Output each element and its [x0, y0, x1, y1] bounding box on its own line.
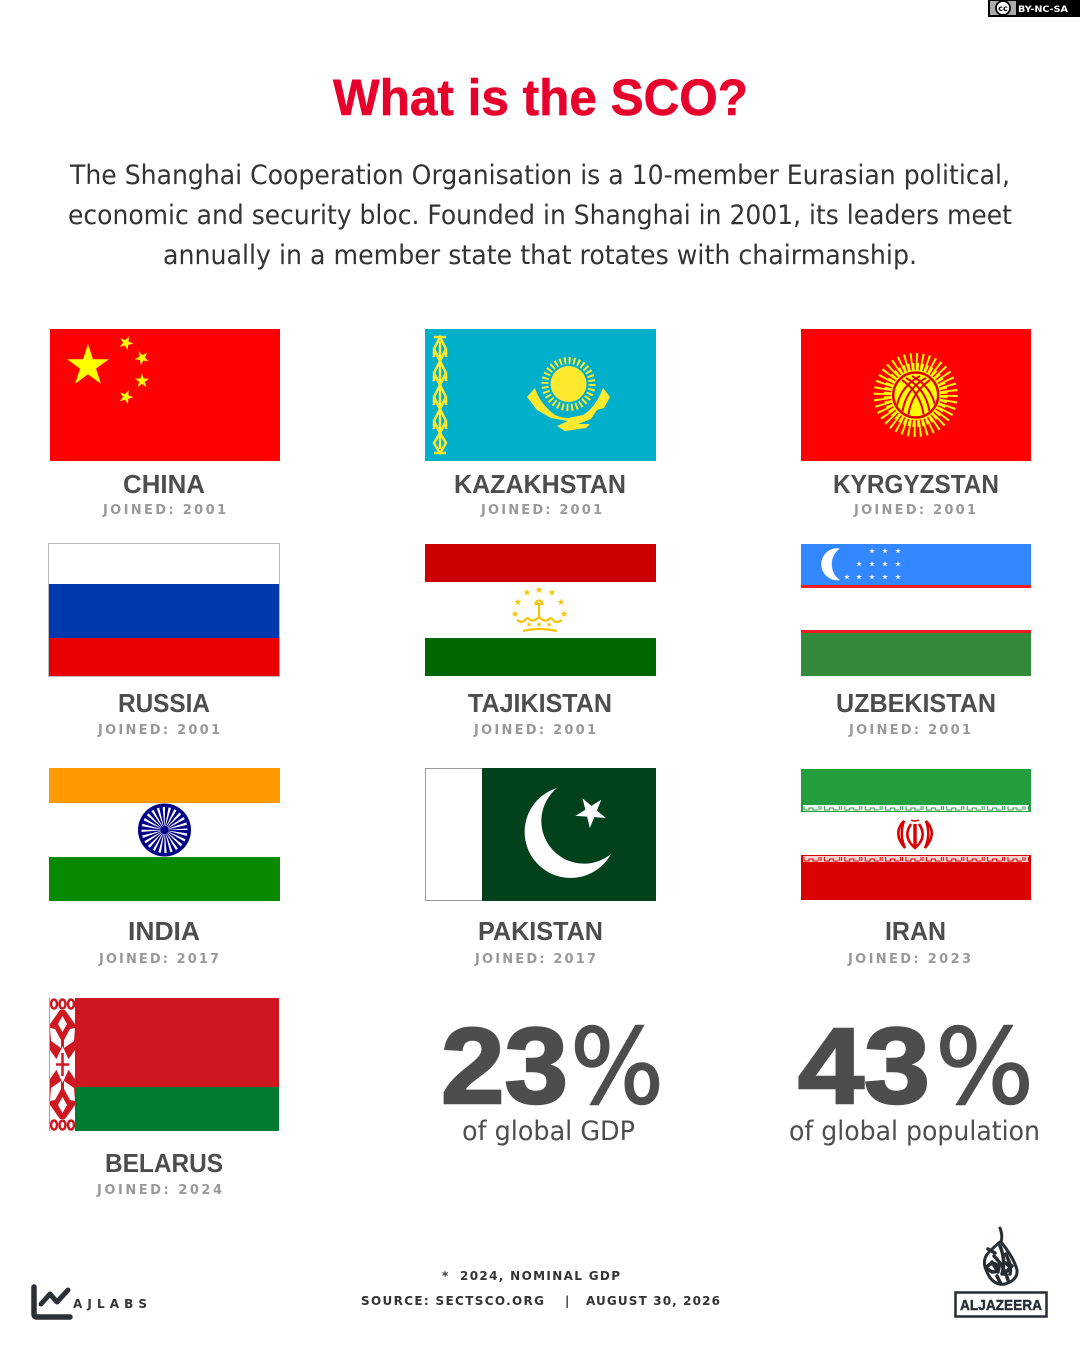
label: Iran: IRAN	[885, 916, 946, 946]
intro text: economic and security bloc. Founded in Shanghai in 2001, its leaders meet	[68, 200, 1012, 231]
panel: Kyrgyzstan	[801, 329, 1031, 518]
panel: Uzbekistan	[801, 544, 1031, 738]
label: Uzbekistan: UZBEKISTAN	[836, 688, 996, 718]
footer notes: SOURCE: SECTSCO.ORG	[361, 1294, 544, 1308]
intro text	[68, 160, 1012, 271]
flag: Russia	[48, 544, 280, 676]
footer notes: 2024, NOMINAL GDP	[460, 1269, 620, 1283]
label: Pakistan: PAKISTAN	[478, 916, 603, 946]
panel: Belarus	[50, 998, 279, 1198]
stat: population: 43	[798, 1005, 930, 1126]
licence badge	[988, 0, 1080, 17]
joined: Kazakhstan: JOINED: 2001	[480, 503, 602, 518]
licence badge: cc	[998, 4, 1008, 13]
label: Belarus: BELARUS	[105, 1148, 223, 1178]
panel: Russia	[48, 544, 280, 738]
joined: Belarus: JOINED: 2024	[96, 1183, 222, 1198]
flag: China	[50, 329, 280, 461]
label: Kyrgyzstan: KYRGYZSTAN	[833, 469, 999, 499]
logo: AJLabs: AJLABS	[73, 1297, 147, 1311]
panel: China	[50, 329, 280, 518]
joined: Iran: JOINED: 2023	[847, 952, 971, 967]
logo: Al Jazeera: ALJAZEERA	[960, 1297, 1042, 1314]
panel: Pakistan	[426, 768, 656, 967]
intro text: The Shanghai Cooperation Organisation is a 10-member Eurasian political,	[69, 160, 1010, 191]
flag: Pakistan	[426, 768, 656, 901]
joined: Kyrgyzstan: JOINED: 2001	[853, 503, 976, 518]
stat: population: of global population	[789, 1116, 1040, 1147]
logo: AJLabs	[34, 1287, 147, 1317]
flag: Tajikistan	[425, 544, 656, 676]
stat: population	[789, 1005, 1040, 1147]
joined: India: JOINED: 2017	[98, 952, 219, 967]
licence badge: BY-NC-SA	[1018, 5, 1068, 15]
panel: Iran	[801, 769, 1031, 967]
footer notes	[361, 1269, 720, 1308]
panel: Tajikistan	[425, 544, 656, 738]
panel: India	[49, 768, 280, 967]
logo: Al Jazeera	[956, 1228, 1046, 1316]
joined: China: JOINED: 2001	[102, 503, 226, 518]
flag: Uzbekistan	[801, 544, 1031, 676]
stat: GDP: 23	[441, 1005, 568, 1126]
label: China: CHINA	[123, 469, 205, 499]
title: What is the SCO?	[333, 69, 748, 126]
stat: GDP: %	[570, 1006, 664, 1128]
stat: population: %	[935, 1006, 1034, 1128]
label: India: INDIA	[128, 916, 200, 946]
joined: Uzbekistan: JOINED: 2001	[848, 723, 971, 738]
flag: India	[49, 768, 280, 901]
stat: GDP: of global GDP	[462, 1116, 635, 1147]
flag: Kyrgyzstan	[801, 329, 1031, 461]
joined: Russia: JOINED: 2001	[97, 723, 220, 738]
footer notes: AUGUST 30, 2026	[586, 1294, 720, 1308]
stat: GDP	[441, 1005, 664, 1147]
panel: Kazakhstan	[425, 329, 656, 518]
joined: Pakistan: JOINED: 2017	[474, 952, 596, 967]
footer notes: *	[442, 1269, 449, 1283]
flag: Kazakhstan	[425, 329, 656, 461]
joined: Tajikistan: JOINED: 2001	[473, 723, 596, 738]
label: Kazakhstan: KAZAKHSTAN	[454, 469, 626, 499]
label: Russia: RUSSIA	[118, 688, 210, 718]
flag: Iran	[801, 769, 1031, 900]
label: Tajikistan: TAJIKISTAN	[468, 688, 612, 718]
flag: Belarus	[50, 998, 279, 1131]
intro text: annually in a member state that rotates with chairmanship.	[163, 240, 917, 271]
footer notes: |	[565, 1294, 569, 1308]
